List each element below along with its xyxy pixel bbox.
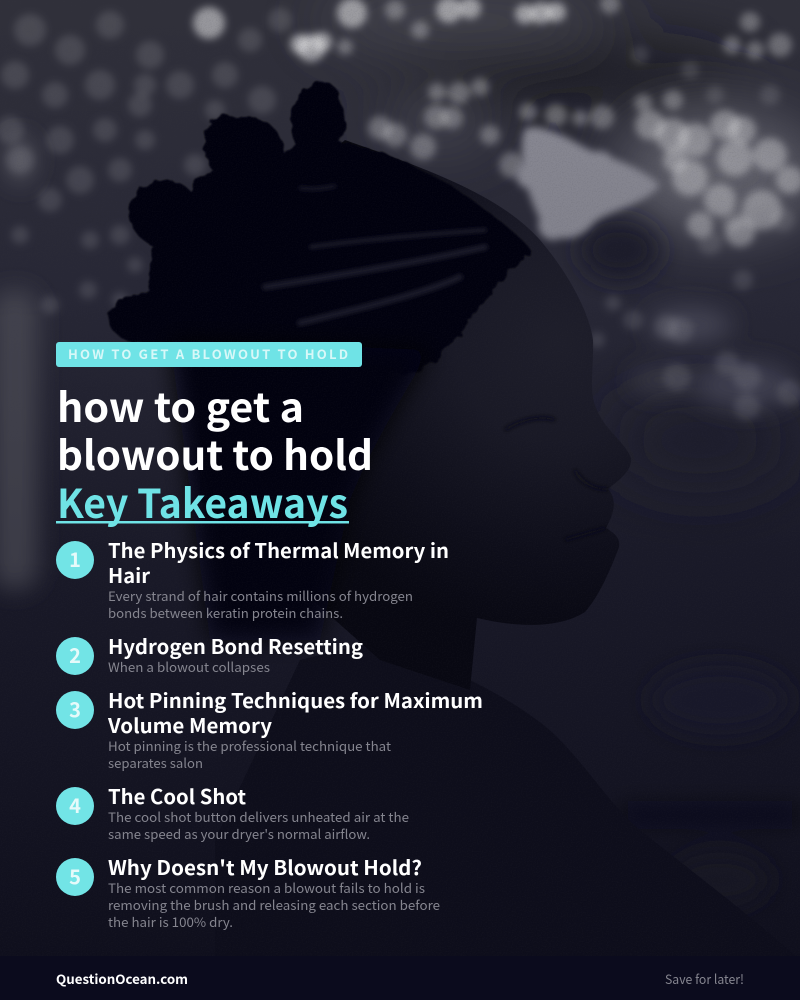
main title: how to get a: [57, 376, 304, 434]
number badge 2: 2: [69, 640, 81, 669]
takeaway 2 description: When a blowout collapses: [108, 657, 270, 676]
hair and buns: [108, 82, 532, 380]
takeaway 2 heading: Hydrogen Bond Resetting: [108, 631, 363, 660]
number badge 2: [56, 637, 94, 675]
woman's head silhouette with braided buns: [108, 82, 631, 690]
takeaway 5 heading: Why Doesn't My Blowout Hold?: [108, 852, 422, 881]
subtitle: key takeaways: Key Takeaways: [57, 472, 348, 530]
takeaway 5 description: The most common reason a blowout fails to hold is: [108, 878, 425, 897]
takeaway 1 description: Every strand of hair contains millions of hydrogen: [108, 586, 413, 605]
takeaway 3 heading: Volume Memory: [107, 710, 273, 739]
eye, nose and lips shading: [505, 418, 608, 540]
takeaway 4 heading: The Cool Shot: [108, 781, 247, 810]
takeaway 1 heading: The Physics of Thermal Memory in: [108, 535, 449, 564]
takeaway 3: [56, 685, 483, 772]
takeaway 1 heading: [108, 535, 449, 589]
main title: blowout to hold: [57, 424, 373, 482]
number badge 1: 1: [69, 544, 81, 573]
braid highlights: [265, 186, 485, 323]
number badge 4: 4: [69, 790, 81, 819]
main title: [57, 376, 373, 482]
number badge 4: [56, 787, 94, 825]
footer save note: Save for later!: [665, 969, 744, 988]
number badge 1: [56, 541, 94, 579]
takeaway 1 description: [108, 586, 413, 622]
takeaway 4 description: same speed as your dryer's normal airflow.: [108, 824, 370, 843]
number badge 5: [56, 858, 94, 896]
badge label: [56, 342, 362, 367]
badge label: HOW TO GET A BLOWOUT TO HOLD: [68, 344, 348, 363]
takeaway 1: [56, 535, 449, 622]
takeaway 3 description: Hot pinning is the professional technique that: [108, 736, 391, 755]
takeaway 4 description: [108, 807, 409, 843]
takeaway 3 description: separates salon: [108, 753, 203, 772]
takeaway 4 description: The cool shot button delivers unheated air at the: [108, 807, 409, 826]
takeaway 5 description: [108, 878, 440, 931]
number badge 3: [56, 691, 94, 729]
bright patch of sky: [516, 127, 660, 240]
takeaway 5: [56, 852, 440, 931]
takeaway 1 description: bonds between keratin protein chains.: [108, 603, 343, 622]
body and shoulder silhouette: [215, 640, 800, 1000]
takeaway 1 heading: Hair: [108, 560, 150, 589]
shadowed hair at nape: [170, 340, 430, 640]
face in profile: [200, 140, 631, 690]
takeaway 5 description: removing the brush and releasing each section before: [108, 895, 440, 914]
takeaway 3 heading: Hot Pinning Techniques for Maximum: [108, 685, 483, 714]
number badge 3: 3: [69, 694, 81, 723]
takeaway 2: [56, 631, 363, 676]
takeaway 3 description: [108, 736, 391, 772]
footer site name: QuestionOcean.com: [56, 969, 188, 988]
takeaway 3 heading: [107, 685, 483, 739]
takeaway 5 description: the hair is 100% dry.: [108, 912, 233, 931]
number badge 5: 5: [69, 861, 81, 890]
footer band: [0, 956, 800, 1000]
takeaway 4: [56, 781, 409, 843]
